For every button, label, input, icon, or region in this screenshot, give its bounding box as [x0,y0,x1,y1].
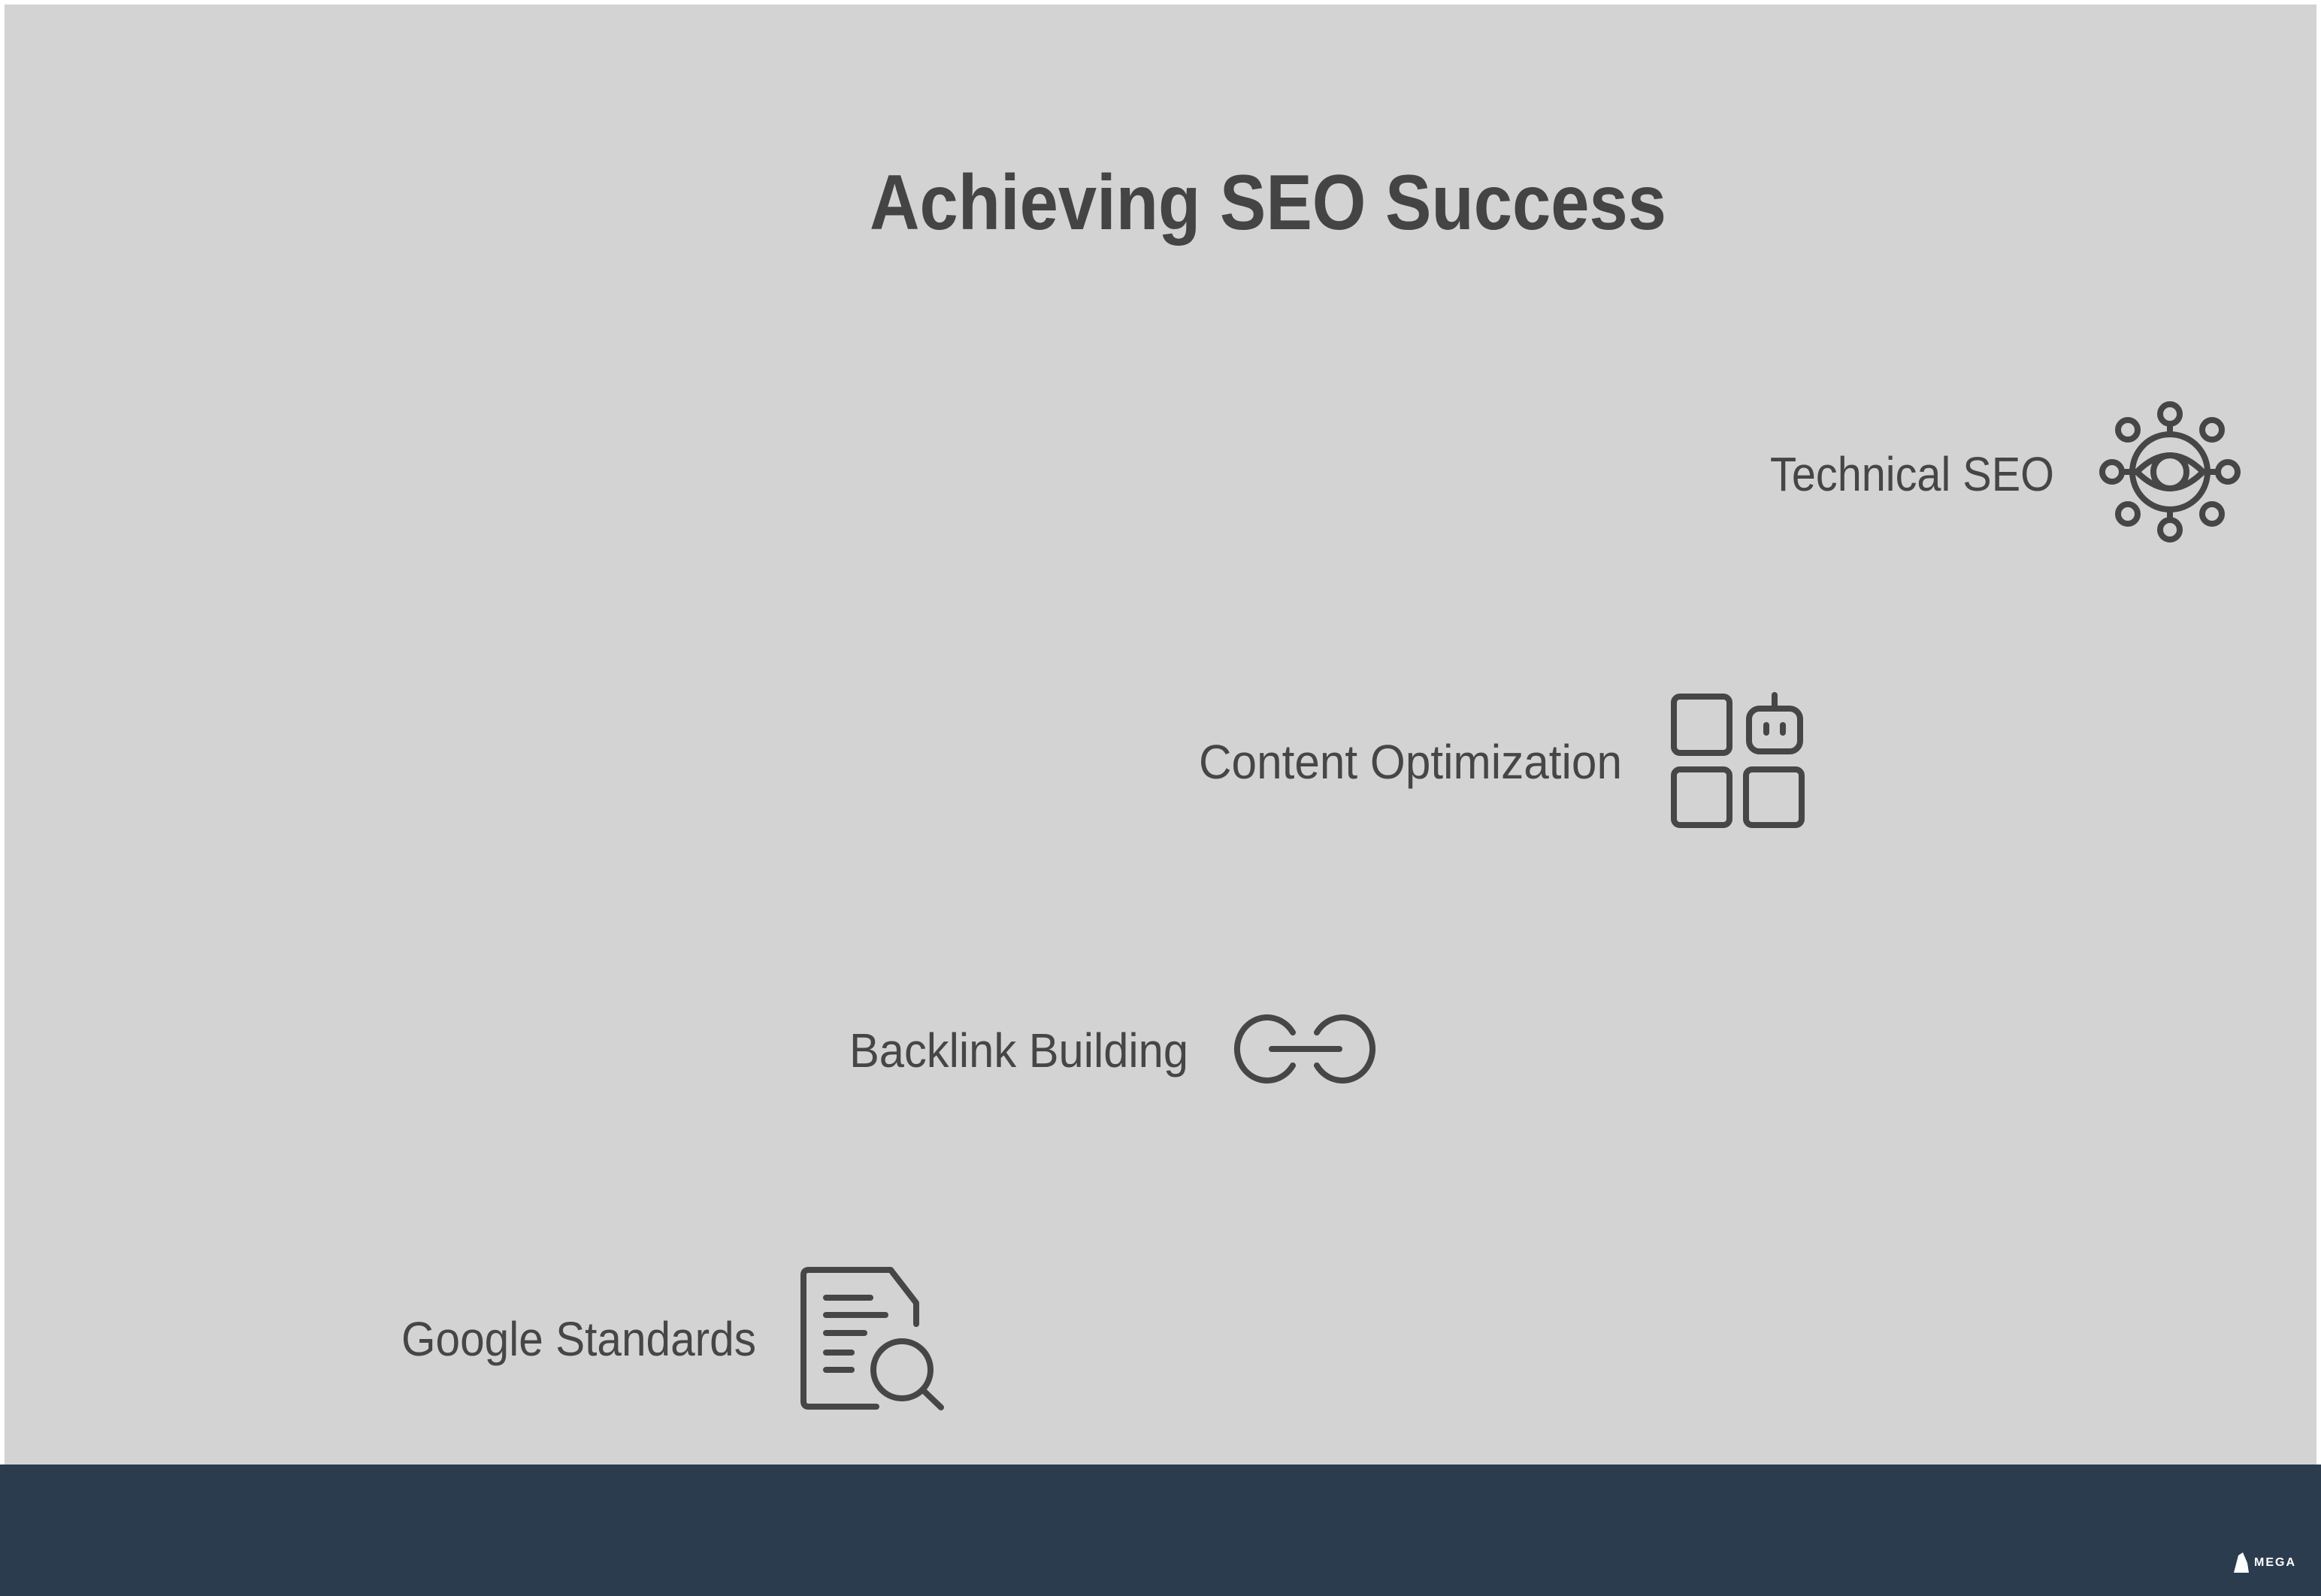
label: Content Optimization: Content Optimization [1199,735,1622,789]
logo: MEGA [2234,1552,2296,1573]
icon: chain link [1237,1017,1372,1081]
footer band [0,1465,2321,1596]
title: Achieving SEO Success [870,159,1666,246]
logo: MEGA: MEGA [2254,1556,2296,1569]
icon: app grid with robot [1674,695,1802,825]
label: Technical SEO: Technical SEO [1770,447,2054,501]
label: Backlink Building: Backlink Building [849,1023,1188,1078]
icon: document search [803,1270,941,1407]
icon: eye network [2102,404,2238,540]
label: Google Standards: Google Standards [401,1312,756,1366]
